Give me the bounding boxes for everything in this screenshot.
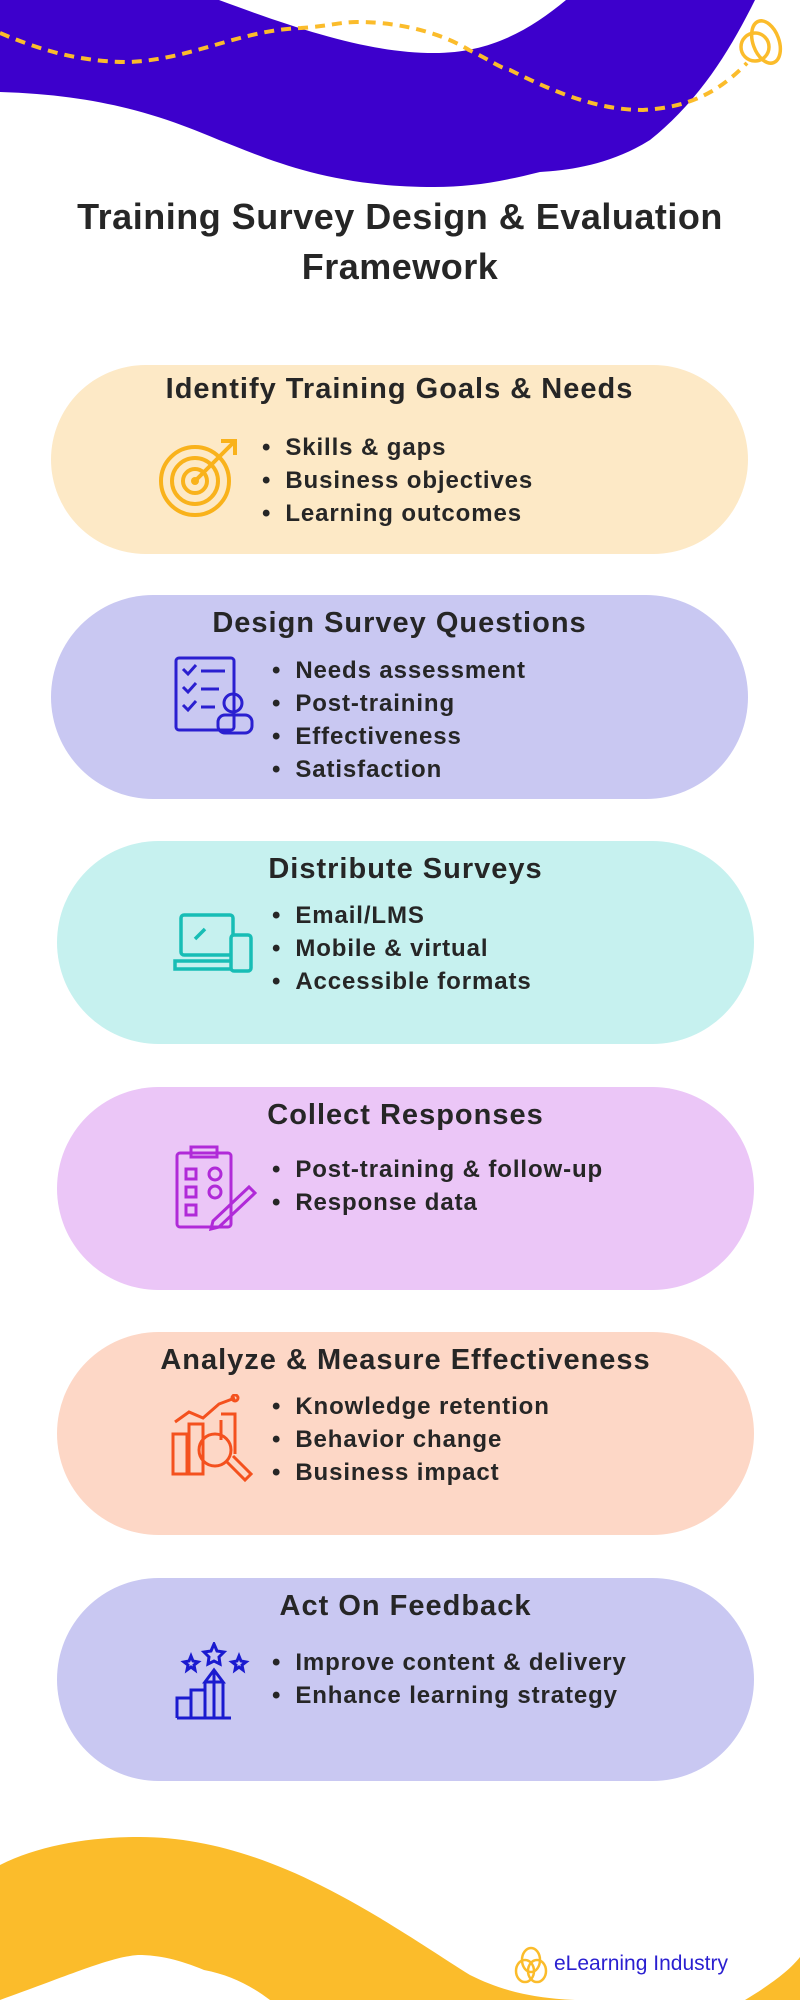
decoration: bottom yellow wave (0, 1837, 800, 2000)
bullets (272, 1649, 627, 1709)
bullets: Effectiveness (295, 723, 462, 750)
bullets: Enhance learning strategy (295, 1682, 618, 1709)
bullets: Behavior change (295, 1426, 502, 1453)
panel: act on feedback (57, 1578, 754, 1781)
panel: act on feedback: Act On Feedback (280, 1590, 531, 1622)
bullets (272, 657, 526, 783)
panel: collect: Collect Responses (267, 1099, 544, 1131)
icon: laptop and phone (173, 913, 253, 973)
icon: clipboard (176, 1146, 257, 1231)
title: Framework (302, 246, 498, 287)
panel: design questions (51, 595, 748, 799)
panel: distribute: Distribute Surveys (268, 853, 543, 885)
bullets: Business objectives (285, 467, 533, 494)
bullets (262, 434, 533, 527)
bullets: Skills & gaps (285, 434, 446, 461)
icon: stars and growth (176, 1642, 250, 1720)
panel: identify goals: Identify Training Goals & Needs (166, 373, 633, 405)
bullets (272, 1156, 603, 1216)
decoration: top purple wave (0, 0, 782, 187)
title (77, 196, 723, 287)
bullets: Email/LMS (295, 902, 425, 929)
panel: design questions: Design Survey Questions (212, 607, 587, 639)
panel: distribute (57, 841, 754, 1044)
bullets: Improve content & delivery (295, 1649, 627, 1676)
panel: identify goals (51, 365, 748, 554)
bullets (272, 1393, 550, 1486)
bullets: Needs assessment (295, 657, 526, 684)
title: Training Survey Design & Evaluation (77, 196, 723, 237)
bullets: Learning outcomes (285, 500, 522, 527)
bullets: Satisfaction (295, 756, 442, 783)
bullets (272, 902, 532, 995)
panel: analyze (57, 1332, 754, 1535)
bullets: Business impact (295, 1459, 500, 1486)
icon: checklist (174, 656, 254, 734)
bullets: Post-training (295, 690, 455, 717)
bullets: Knowledge retention (295, 1393, 550, 1420)
bullets: Accessible formats (295, 968, 532, 995)
logo: eLearning Industry: eLearning Industry (554, 1952, 728, 1975)
panel: collect (57, 1087, 754, 1290)
icon: chart with magnifier (172, 1394, 253, 1482)
panel: analyze: Analyze & Measure Effectiveness (160, 1344, 651, 1376)
bullets: Response data (295, 1189, 478, 1216)
bullets: Mobile & virtual (295, 935, 488, 962)
bullets: Post-training & follow-up (295, 1156, 603, 1183)
icon: target (159, 439, 237, 517)
logo: eLearning Industry (514, 1946, 728, 1984)
